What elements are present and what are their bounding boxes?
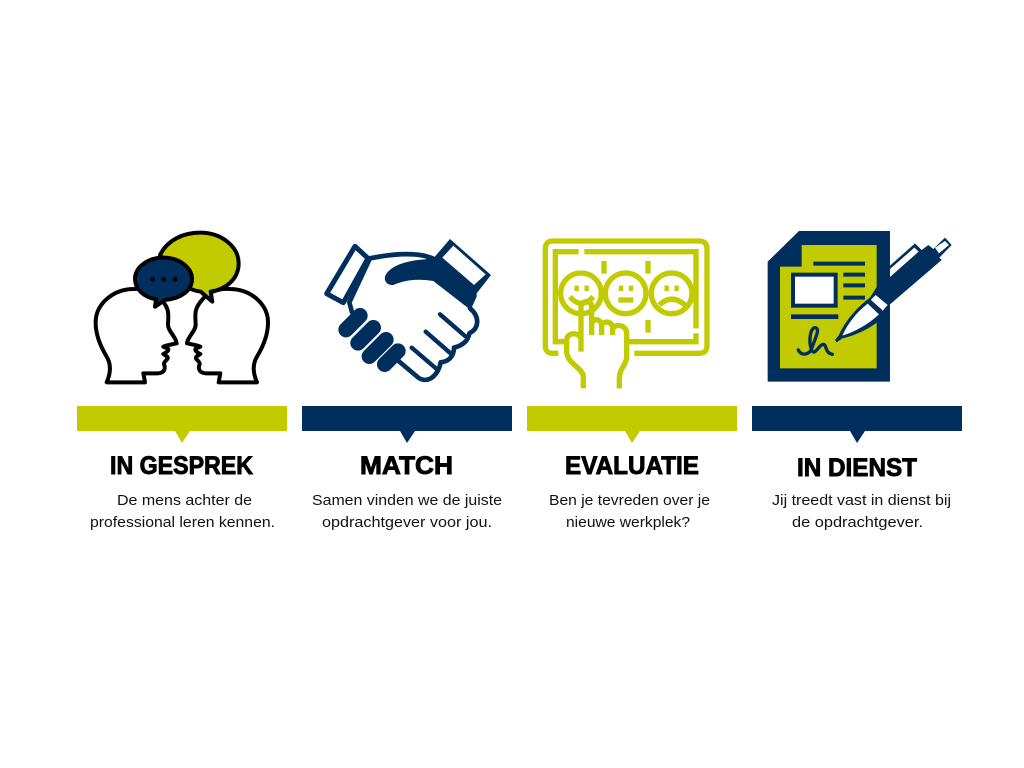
icon: touch screen with smileys: [545, 241, 707, 388]
text block: [549, 492, 710, 531]
icon: two heads talking: [96, 233, 268, 382]
text block: Ben je tevreden over je: [549, 492, 710, 509]
heading: match: MATCH: [360, 452, 453, 480]
panel: in gesprek: [77, 233, 287, 531]
heading: in dienst: IN DIENST: [797, 454, 917, 482]
text block: Jij treedt vast in dienst bij: [772, 492, 951, 509]
text block: de opdrachtgever.: [792, 514, 923, 531]
text block: nieuwe werkplek?: [566, 514, 690, 531]
bar with pointer: [302, 406, 512, 443]
bar with pointer: [752, 406, 962, 443]
panel: evaluatie: [527, 241, 737, 531]
text block: [312, 492, 502, 531]
heading: in gesprek: IN GESPREK: [110, 452, 253, 480]
text block: [772, 492, 951, 531]
text block: De mens achter de: [117, 492, 252, 509]
panel: match: [302, 239, 512, 531]
panel: in dienst: [752, 231, 962, 531]
heading: evaluatie: EVALUATIE: [565, 452, 699, 480]
text block: opdrachtgever voor jou.: [322, 514, 492, 531]
icon: handshake: [327, 239, 491, 380]
icon: signed contract with pen: [768, 231, 952, 382]
text block: professional leren kennen.: [90, 514, 275, 531]
text block: [90, 492, 275, 531]
bar with pointer: [527, 406, 737, 443]
bar with pointer: [77, 406, 287, 443]
text block: Samen vinden we de juiste: [312, 492, 502, 509]
